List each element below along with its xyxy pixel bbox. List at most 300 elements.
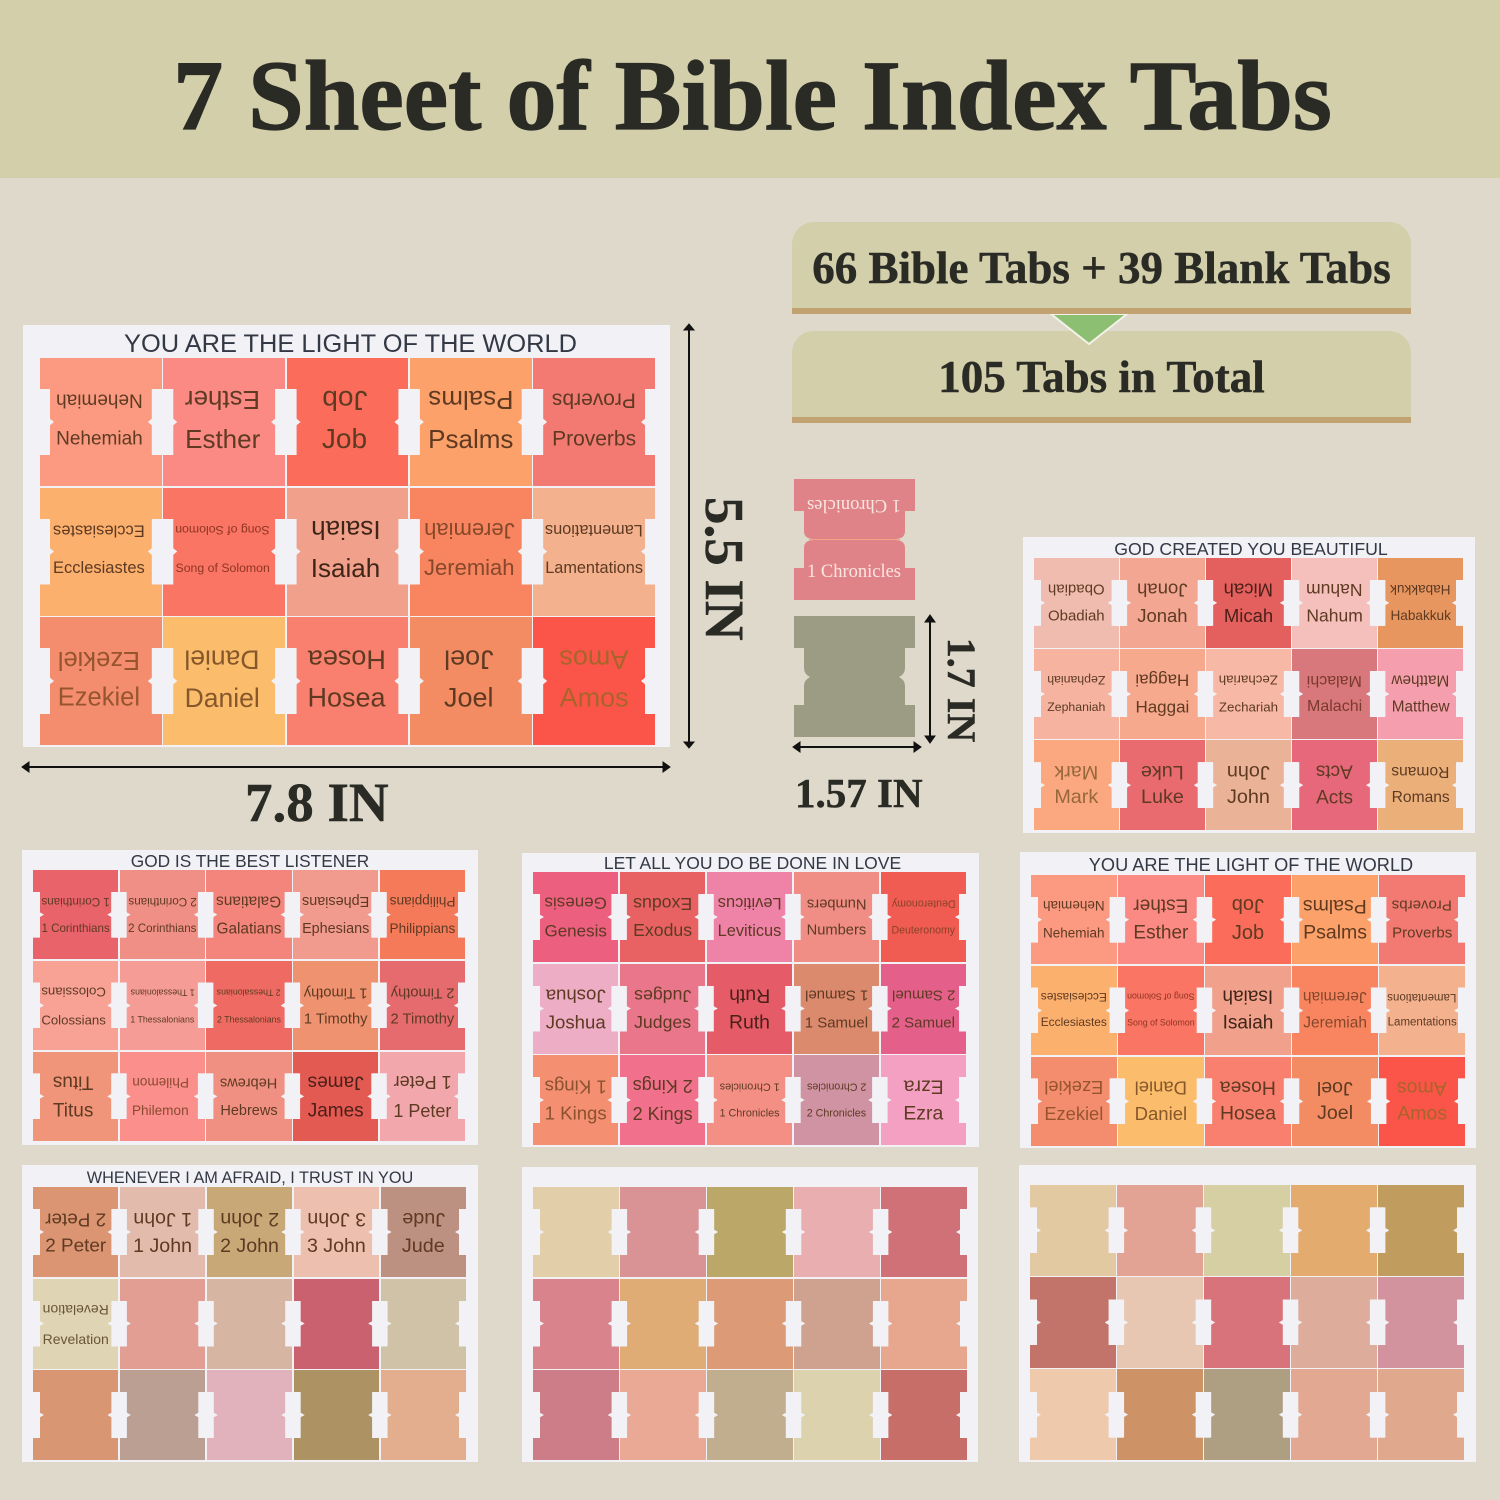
tab: Esther: Esther <box>1133 894 1188 915</box>
tab: Esther <box>1118 875 1204 964</box>
blank tab <box>707 1187 793 1277</box>
tab: Jeremiah: Jeremiah <box>1303 988 1367 1004</box>
tab: Jude: Jude <box>402 1208 445 1230</box>
tab: Philemon: Philemon <box>132 1103 189 1118</box>
tab: Proverbs: Proverbs <box>552 427 636 450</box>
blank tab <box>1291 1277 1377 1368</box>
tab: 1 John <box>120 1187 205 1277</box>
tab: 1 Chronicles: 1 Chronicles <box>719 1080 780 1092</box>
tab: 2 Chronicles: 2 Chronicles <box>807 1080 866 1092</box>
tab: Hosea <box>287 617 408 745</box>
tab: Mark: Mark <box>1054 761 1098 783</box>
tab: 2 Corinthians <box>120 870 205 959</box>
panel: sheet, Whenever I am afraid <box>22 1165 478 1462</box>
tab: Nahum <box>1292 558 1377 648</box>
tab: Jonah: Jonah <box>1137 605 1188 626</box>
tab: Romans <box>1378 740 1463 830</box>
tab: 1 Kings: 1 Kings <box>545 1103 607 1124</box>
blank tab <box>120 1370 205 1460</box>
tab: 2 John: 2 John <box>220 1208 279 1230</box>
tab: Revelation: Revelation <box>43 1331 109 1347</box>
tab: Lamentations: Lamentations <box>545 521 643 539</box>
tab: Micah: Micah <box>1224 579 1273 600</box>
tab: 1 Timothy: 1 Timothy <box>304 1011 368 1027</box>
tab: Judges: Judges <box>634 985 691 1005</box>
tab: 2 Thessalonians: 2 Thessalonians <box>217 1014 281 1024</box>
tab grid <box>33 1187 466 1460</box>
panel: sheet, Let all you do be done in love <box>522 853 979 1147</box>
tab: Haggai <box>1120 649 1205 739</box>
tab: Romans: Romans <box>1392 789 1450 806</box>
tab: Galatians: Galatians <box>216 893 282 910</box>
tab: Revelation: Revelation <box>43 1302 109 1318</box>
tab: Philippians <box>380 870 465 959</box>
tab: Joel: Joel <box>444 682 494 712</box>
tab: Psalms <box>410 358 532 486</box>
tab: 1 Corinthians <box>33 870 118 959</box>
panel: large sheet, You are the light of the world <box>23 325 670 747</box>
tab: Lamentations <box>533 488 655 616</box>
tab: Ezekiel: Ezekiel <box>58 683 140 711</box>
tab: Titus: Titus <box>53 1072 93 1093</box>
tab: Ecclesiastes: Ecclesiastes <box>53 559 145 577</box>
tab: Isaiah: Isaiah <box>1223 985 1273 1006</box>
tab: Daniel: Daniel <box>1135 1103 1187 1124</box>
tab: James <box>293 1052 378 1141</box>
tab: Esther <box>163 358 285 486</box>
icon: folded sample tab, 1 Chronicles: 1 Chronicles <box>807 562 901 582</box>
tab grid <box>1031 875 1465 1146</box>
tab: Hosea: Hosea <box>307 682 386 712</box>
tab: Ruth: Ruth <box>729 1011 770 1033</box>
tab: Obadiah <box>1034 558 1119 648</box>
tab: Ezekiel <box>1031 1057 1117 1146</box>
tab: John: John <box>1227 761 1270 783</box>
tab: 1 Peter <box>380 1052 465 1141</box>
tab: 1 Timothy <box>293 961 378 1050</box>
tab: Lamentations: Lamentations <box>1388 990 1457 1002</box>
tab grid <box>33 870 465 1141</box>
tab: 1 Samuel: 1 Samuel <box>805 986 868 1003</box>
tab: Leviticus <box>707 872 792 962</box>
tab grid <box>533 1187 967 1460</box>
tab: 3 John <box>294 1187 379 1277</box>
title: 7 Sheet of Bible Index Tabs <box>173 40 1332 151</box>
tab: 2 Samuel: 2 Samuel <box>892 986 955 1003</box>
tab: Colossians: Colossians <box>41 1012 106 1027</box>
blank tab <box>1204 1277 1290 1368</box>
tab: 2 Corinthians: 2 Corinthians <box>128 895 196 908</box>
tab: Numbers <box>794 872 879 962</box>
blank tab <box>294 1370 379 1460</box>
panel: sheet, God created you beautiful <box>1023 537 1475 833</box>
panel: blank sheet 1 <box>522 1167 978 1462</box>
blank tab <box>533 1187 619 1277</box>
tab: Numbers: Numbers <box>807 923 866 939</box>
tab: Hebrews: Hebrews <box>220 1075 278 1091</box>
tab: 2 Thessalonians <box>206 961 292 1050</box>
tab: 1 Thessalonians <box>120 961 205 1050</box>
tab: Zechariah: Zechariah <box>1219 699 1278 714</box>
title band <box>0 0 1500 178</box>
tab: Amos: Amos <box>560 682 629 712</box>
tab: Lamentations: Lamentations <box>545 559 643 577</box>
tab: Ruth: Ruth <box>729 984 770 1006</box>
tab: 2 Chronicles <box>794 1055 879 1145</box>
tab: 1 Thessalonians: 1 Thessalonians <box>130 987 194 997</box>
blank tab <box>1204 1369 1290 1460</box>
tab: Proverbs <box>533 358 655 486</box>
tab: Jonah <box>1120 558 1205 648</box>
tab: 2 Samuel: 2 Samuel <box>892 1014 955 1031</box>
tab: Joel <box>1292 1057 1378 1146</box>
blank tab <box>294 1278 379 1368</box>
tab: Leviticus: Leviticus <box>718 922 781 940</box>
tab: Malachi: Malachi <box>1307 698 1362 715</box>
tab: Isaiah: Isaiah <box>1223 1013 1273 1034</box>
tab: 2 John: 2 John <box>220 1236 279 1258</box>
tab: Ezra <box>881 1055 966 1145</box>
blank tab <box>1291 1185 1377 1276</box>
tab: John <box>1206 740 1291 830</box>
tab: 2 Thessalonians: 2 Thessalonians <box>217 987 281 997</box>
tab: Titus: Titus <box>53 1100 93 1121</box>
tab: Colossians: Colossians <box>41 984 106 999</box>
tab: 2 Peter <box>33 1187 118 1277</box>
tab: Malachi <box>1292 649 1377 739</box>
tab: Acts: Acts <box>1316 788 1353 809</box>
icon: folded sample tab, 1 Chronicles <box>794 479 915 600</box>
tab: Nehemiah: Nehemiah <box>1043 898 1105 913</box>
tab: Joel: Joel <box>1317 1102 1353 1124</box>
tab: Job: Job <box>1232 894 1264 916</box>
tab: Ecclesiastes: Ecclesiastes <box>53 521 145 539</box>
tab: 1 Samuel: 1 Samuel <box>805 1014 868 1031</box>
tab: Genesis <box>533 872 618 962</box>
tab: John: John <box>1227 786 1270 808</box>
dimension label: 7.8 IN: 7.8 IN <box>245 772 389 833</box>
sheet heading: LET ALL YOU DO BE DONE IN LOVE <box>604 853 901 873</box>
tab: 1 Peter: 1 Peter <box>393 1072 451 1092</box>
sheet heading: YOU ARE THE LIGHT OF THE WORLD <box>124 330 577 358</box>
tab: Ezekiel <box>40 617 162 745</box>
icon: green down arrow <box>1050 314 1128 346</box>
tab: Jeremiah: Jeremiah <box>1303 1015 1367 1032</box>
tab: Ecclesiastes <box>40 488 162 616</box>
blank tab <box>533 1370 619 1460</box>
tab: James: James <box>308 1072 364 1093</box>
tab: Malachi: Malachi <box>1307 672 1362 689</box>
blank tab <box>794 1187 880 1277</box>
tab: Amos <box>533 617 655 745</box>
tab: Psalms: Psalms <box>428 385 513 415</box>
tab: Habakkuk: Habakkuk <box>1390 608 1451 623</box>
sheet heading: GOD CREATED YOU BEAUTIFUL <box>1114 539 1388 559</box>
callout: total tabs: 105 Tabs in Total <box>938 352 1265 402</box>
tab: Deuteronomy <box>881 872 966 962</box>
tab: 1 John: 1 John <box>133 1236 192 1258</box>
blank tab <box>33 1370 118 1460</box>
tab: Isaiah: Isaiah <box>311 553 380 583</box>
callout: tab counts <box>792 222 1411 314</box>
tab: Daniel <box>1118 1057 1204 1146</box>
tab: Amos: Amos <box>1397 1103 1447 1125</box>
tab: Hebrews: Hebrews <box>220 1102 278 1118</box>
tab: 2 Peter: 2 Peter <box>45 1236 106 1257</box>
tab: Luke <box>1120 740 1205 830</box>
tab: 2 Samuel <box>881 964 966 1054</box>
tab: Ezekiel: Ezekiel <box>1044 1077 1103 1098</box>
panel: sheet, God is the best listener <box>22 850 478 1145</box>
tab: 2 Timothy: 2 Timothy <box>391 984 454 1000</box>
tab: Lamentations: Lamentations <box>1388 1017 1457 1029</box>
tab: Nehemiah: Nehemiah <box>56 390 143 411</box>
tab: 2 Corinthians: 2 Corinthians <box>128 922 196 935</box>
tab: Psalms <box>1292 875 1378 964</box>
tab: Job: Job <box>322 423 367 454</box>
tab: Jonah: Jonah <box>1137 579 1188 600</box>
tab: Joshua <box>533 964 618 1054</box>
blank tab <box>1378 1369 1464 1460</box>
tab: Hosea: Hosea <box>1220 1103 1276 1125</box>
blank tab <box>881 1370 967 1460</box>
tab: Job: Job <box>1232 922 1264 944</box>
tab: Psalms: Psalms <box>1303 895 1367 917</box>
tab: 2 Timothy: 2 Timothy <box>391 1011 454 1027</box>
tab: 2 Kings <box>620 1055 705 1145</box>
tab: 3 John: 3 John <box>307 1208 366 1230</box>
blank tab <box>1117 1277 1203 1368</box>
tab: 1 Chronicles: 1 Chronicles <box>719 1108 780 1120</box>
tab: 2 Peter: 2 Peter <box>45 1208 106 1230</box>
tab: 2 Kings: 2 Kings <box>633 1076 693 1096</box>
dimension label: 5.5 IN: 5.5 IN <box>694 497 755 641</box>
icon: folded sample tab, 1 Chronicles: 1 Chronicles <box>807 495 901 515</box>
tab: Daniel: Daniel <box>185 644 260 674</box>
blank tab <box>1117 1185 1203 1276</box>
tab grid <box>1030 1185 1464 1460</box>
tab: Acts <box>1292 740 1377 830</box>
sheet heading: WHENEVER I AM AFRAID, I TRUST IN YOU <box>87 1169 413 1187</box>
callout: total tabs <box>792 331 1411 423</box>
tab: Job <box>287 358 408 486</box>
tab: Jude: Jude <box>402 1235 445 1257</box>
tab: 1 Corinthians: 1 Corinthians <box>41 922 110 935</box>
tab: 2 Chronicles: 2 Chronicles <box>807 1108 866 1120</box>
blank tab <box>533 1278 619 1368</box>
tab: Amos <box>1379 1057 1465 1146</box>
tab: Nehemiah <box>1031 875 1117 964</box>
tab: Zephaniah: Zephaniah <box>1047 700 1105 714</box>
tab: Joel: Joel <box>1317 1076 1353 1098</box>
tab: Proverbs: Proverbs <box>1392 896 1452 913</box>
tab: Esther: Esther <box>185 424 260 454</box>
tab: Zechariah: Zechariah <box>1219 673 1278 688</box>
tab grid <box>40 358 655 745</box>
dimension label: 1.7 IN: 1.7 IN <box>939 638 984 742</box>
tab: Nehemiah: Nehemiah <box>1043 925 1105 940</box>
tab: Ecclesiastes <box>1031 966 1117 1055</box>
blank tab <box>794 1370 880 1460</box>
dimension label: 1.57 IN: 1.57 IN <box>795 770 923 816</box>
blank tab <box>1291 1369 1377 1460</box>
tab: Ezra: Ezra <box>903 1076 943 1098</box>
tab: Hosea <box>1205 1057 1291 1146</box>
tab: Mark <box>1034 740 1119 830</box>
tab: Exodus: Exodus <box>633 921 692 941</box>
tab: Ecclesiastes: Ecclesiastes <box>1041 990 1107 1004</box>
dimension: sheet width arrow <box>21 761 671 773</box>
tab: James: James <box>308 1100 364 1121</box>
blank tab <box>707 1370 793 1460</box>
tab: Revelation <box>33 1278 118 1368</box>
tab: Esther: Esther <box>185 385 260 415</box>
tab: Jeremiah: Jeremiah <box>424 555 515 580</box>
blank tab <box>1117 1369 1203 1460</box>
tab: Luke: Luke <box>1141 786 1184 808</box>
tab: Song of Solomon: Song of Solomon <box>176 523 270 537</box>
tab: Amos: Amos <box>560 645 629 675</box>
tab: Habakkuk: Habakkuk <box>1390 582 1451 597</box>
tab: Daniel: Daniel <box>1135 1077 1187 1098</box>
tab: Judges <box>620 964 705 1054</box>
panel: blank sheet 2 <box>1019 1165 1476 1462</box>
tab: Isaiah <box>287 488 408 616</box>
dimension: tab height arrow <box>924 614 936 744</box>
blank tab <box>1030 1277 1116 1368</box>
tab: Micah: Micah <box>1224 605 1273 626</box>
tab: 1 Chronicles <box>707 1055 792 1145</box>
tab: Philippians: Philippians <box>390 921 455 936</box>
tab: Genesis: Genesis <box>544 922 607 941</box>
sheet heading: YOU ARE THE LIGHT OF THE WORLD <box>1089 855 1413 875</box>
dimension: tab width arrow <box>792 741 922 753</box>
blank tab <box>794 1278 880 1368</box>
blank tab <box>207 1278 292 1368</box>
tab: Ezra: Ezra <box>903 1103 943 1125</box>
tab: Haggai: Haggai <box>1135 697 1189 716</box>
tab: Obadiah: Obadiah <box>1048 607 1105 624</box>
tab: Ezekiel: Ezekiel <box>58 646 140 674</box>
blank tab <box>1030 1369 1116 1460</box>
tab: 1 John: 1 John <box>133 1208 192 1230</box>
tab: Ephesians <box>293 870 378 959</box>
tab: Haggai: Haggai <box>1135 671 1189 690</box>
tab: Matthew: Matthew <box>1392 672 1450 689</box>
blank tab <box>881 1187 967 1277</box>
tab: Ecclesiastes: Ecclesiastes <box>1041 1015 1107 1029</box>
blank tab <box>1204 1185 1290 1276</box>
tab: Joel <box>410 617 532 745</box>
tab: 1 Timothy: 1 Timothy <box>304 984 368 1000</box>
tab: Exodus <box>620 872 705 962</box>
tab: Colossians <box>33 961 118 1050</box>
tab: Genesis: Genesis <box>545 894 607 913</box>
tab grid <box>533 872 966 1145</box>
blank tab <box>620 1278 706 1368</box>
tab: 1 Kings <box>533 1055 618 1145</box>
tab: Micah <box>1206 558 1291 648</box>
tab: Galatians: Galatians <box>216 920 282 937</box>
blank tab <box>1030 1185 1116 1276</box>
tab: Exodus: Exodus <box>633 894 692 914</box>
tab: Zechariah <box>1206 649 1291 739</box>
tab: Leviticus: Leviticus <box>718 894 781 912</box>
tab: Ruth <box>707 964 792 1054</box>
tab: Judges: Judges <box>634 1012 691 1032</box>
blank tab <box>620 1187 706 1277</box>
tab: Philemon: Philemon <box>132 1075 189 1090</box>
sheet heading: GOD IS THE BEST LISTENER <box>131 851 369 871</box>
icon: blank tab silhouette <box>794 616 915 737</box>
tab: 2 Timothy <box>380 961 465 1050</box>
tab: Luke: Luke <box>1141 761 1184 783</box>
tab: Ephesians: Ephesians <box>302 921 369 937</box>
tab: Zephaniah: Zephaniah <box>1047 673 1105 687</box>
tab: Acts: Acts <box>1316 761 1353 782</box>
tab: Habakkuk <box>1378 558 1463 648</box>
tab: Proverbs: Proverbs <box>1392 924 1452 941</box>
tab: Song of Solomon <box>163 488 285 616</box>
blank tab <box>207 1370 292 1460</box>
tab: Proverbs <box>1379 875 1465 964</box>
tab: Jeremiah: Jeremiah <box>424 518 515 543</box>
tab: Numbers: Numbers <box>807 895 866 911</box>
tab: Jeremiah <box>410 488 532 616</box>
panel: sheet, You are the light of the world (small) <box>1020 852 1476 1148</box>
tab: Song of Solomon: Song of Solomon <box>176 561 270 575</box>
tab: Romans: Romans <box>1392 763 1450 780</box>
tab: Nehemiah <box>40 358 162 486</box>
tab: Psalms: Psalms <box>428 424 513 454</box>
tab: 3 John: 3 John <box>307 1236 366 1258</box>
tab: Titus <box>33 1052 118 1141</box>
tab: Song of Solomon: Song of Solomon <box>1127 991 1195 1001</box>
blank tab <box>881 1278 967 1368</box>
tab: Philemon <box>120 1052 205 1141</box>
tab: Ephesians: Ephesians <box>302 893 369 909</box>
tab: Lamentations <box>1379 966 1465 1055</box>
tab: Hebrews <box>206 1052 292 1141</box>
tab: Proverbs: Proverbs <box>552 389 636 412</box>
tab: Job <box>1205 875 1291 964</box>
tab: Jude <box>381 1187 466 1277</box>
tab: Job: Job <box>322 385 367 416</box>
tab: Isaiah: Isaiah <box>311 515 380 545</box>
tab: Hosea: Hosea <box>307 645 386 675</box>
blank tab <box>1378 1277 1464 1368</box>
blank tab <box>1378 1185 1464 1276</box>
tab: 1 Samuel <box>794 964 879 1054</box>
tab: Song of Solomon: Song of Solomon <box>1127 1018 1195 1028</box>
tab: Esther: Esther <box>1133 922 1188 943</box>
blank tab <box>381 1278 466 1368</box>
blank tab <box>707 1278 793 1368</box>
tab: Philippians: Philippians <box>390 894 455 909</box>
tab: Matthew: Matthew <box>1392 698 1450 715</box>
tab: Nahum: Nahum <box>1306 580 1363 600</box>
blank tab <box>120 1278 205 1368</box>
tab: Nehemiah: Nehemiah <box>56 428 143 449</box>
tab: Galatians <box>206 870 292 959</box>
blank tab <box>381 1370 466 1460</box>
tab: Matthew <box>1378 649 1463 739</box>
tab: Amos: Amos <box>1397 1076 1447 1098</box>
tab: Song of Solomon <box>1118 966 1204 1055</box>
tab: Jeremiah <box>1292 966 1378 1055</box>
tab: Mark: Mark <box>1054 786 1098 808</box>
tab: 1 Thessalonians: 1 Thessalonians <box>130 1014 194 1024</box>
